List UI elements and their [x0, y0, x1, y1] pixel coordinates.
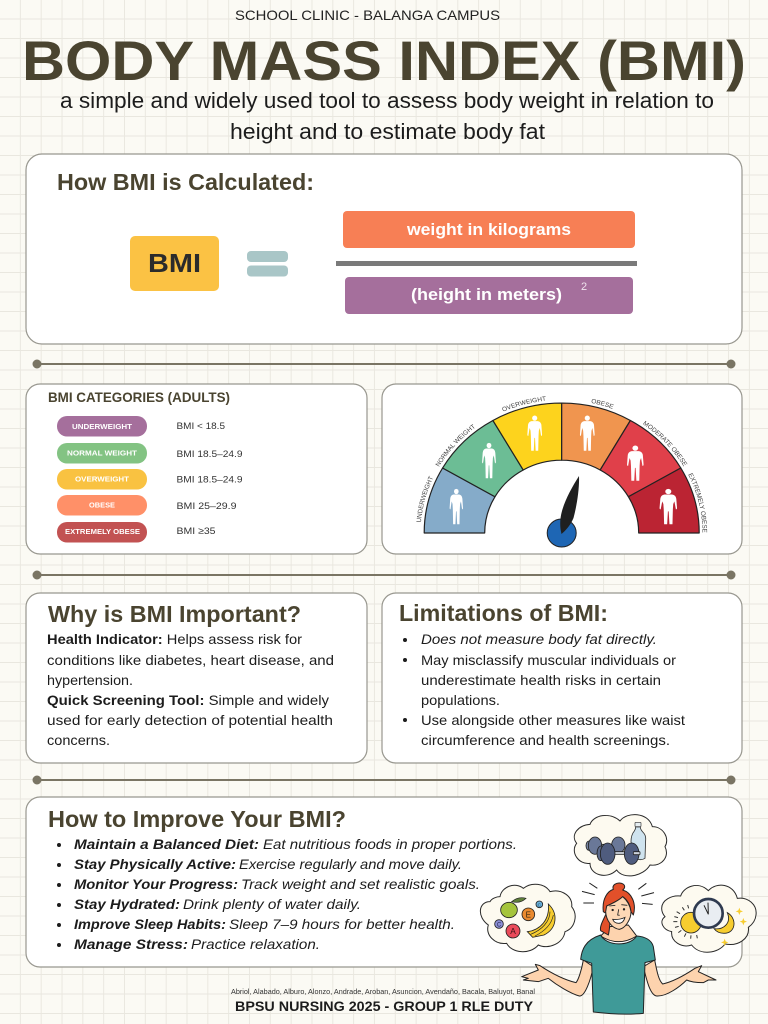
- subtitle: [60, 88, 714, 144]
- category: obese: BMI 25–29.9: [176, 501, 236, 512]
- text block: improvement tips: Drink plenty of water daily.: [183, 896, 361, 912]
- text block: limitations list: Does not measure body fat directly.: [421, 631, 657, 647]
- category: overweight: [57, 469, 242, 490]
- category: extremely obese: [57, 522, 216, 542]
- BMI box: BMI: [148, 248, 201, 278]
- text block: limitations list: Use alongside other measures like waist: [421, 712, 685, 728]
- text block: limitations list: May misclassify muscular individuals or: [421, 652, 676, 668]
- icon: cloud with clock, sun and moon: [662, 885, 756, 952]
- category: overweight: BMI 18.5–24.9: [176, 474, 242, 486]
- numerator: weight in kilograms: [343, 211, 635, 248]
- category: normal weight: BMI 18.5–24.9: [176, 449, 242, 460]
- icon: cloud with fruits and vitamins: C: [497, 922, 502, 928]
- gauge labels: [416, 396, 708, 532]
- illustration: woman with health thought clouds: [480, 815, 756, 1014]
- gauge labels: EXTREMELY OBESE: [688, 473, 708, 532]
- panel: limitations of BMI: [382, 593, 742, 763]
- gauge labels: MODERATE OBESE: [643, 420, 688, 466]
- header: school clinic: SCHOOL CLINIC - BALANGA CAMPUS: [235, 7, 500, 23]
- subtitle: height and to estimate body fat: [230, 119, 545, 144]
- equals sign: [247, 251, 288, 276]
- gauge labels: OBESE: [592, 399, 614, 409]
- icon: cloud with dumbbells and water bottle: [574, 815, 667, 876]
- text block: improvement tips: Improve Sleep Habits:: [74, 916, 226, 932]
- text block: why BMI is important: concerns.: [47, 732, 110, 748]
- gauge needle: [560, 476, 579, 534]
- footer: group members: Abriol, Alabado, Alburo, Alonzo, Andrade, Aroban, Asuncion, Avendaño, Bacala, Baluyot, Banal: [231, 989, 535, 996]
- icon: cloud with fruits and vitamins: A: [510, 926, 516, 936]
- denominator: height in meters squared: (height in meters): [411, 285, 562, 304]
- icon: cloud with fruits and vitamins: E: [526, 910, 531, 919]
- heading: how to improve your BMI: How to Improve Your BMI?: [48, 806, 346, 832]
- text block: limitations list: [403, 631, 685, 748]
- category: underweight: [57, 416, 225, 436]
- category: extremely obese: EXTREMELY OBESE: [65, 527, 140, 536]
- denominator: height in meters squared: [345, 277, 633, 314]
- text block: limitations list: underestimate health risks in certain: [421, 672, 661, 688]
- text block: improvement tips: Manage Stress:: [74, 936, 188, 952]
- text block: why BMI is important: used for early detection of potential health: [47, 712, 333, 728]
- category: obese: [57, 495, 236, 516]
- text block: improvement tips: Monitor Your Progress:: [74, 876, 238, 892]
- text block: limitations list: circumference and health screenings.: [421, 732, 670, 748]
- text block: limitations list: populations.: [421, 692, 500, 708]
- text block: why BMI is important: Health Indicator: Helps assess risk for: [47, 631, 302, 647]
- text block: improvement tips: Stay Hydrated:: [74, 896, 180, 912]
- text block: why BMI is important: Quick Screening Tool: Simple and widely: [47, 692, 329, 708]
- gauge hub: [547, 519, 576, 547]
- fraction bar: [336, 261, 637, 266]
- BMI box: [130, 236, 219, 291]
- heading: how BMI is calculated: How BMI is Calculated:: [57, 169, 314, 195]
- category: obese: OBESE: [89, 500, 115, 510]
- text block: improvement tips: Sleep 7–9 hours for better health.: [229, 916, 455, 932]
- gauge labels: NORMAL WEIGHT: [435, 424, 474, 466]
- text block: improvement tips: [57, 836, 517, 952]
- subtitle: a simple and widely used tool to assess body weight in relation to: [60, 88, 714, 113]
- icon: woman arms and torso: [522, 925, 716, 1014]
- gauge labels: OVERWEIGHT: [502, 396, 546, 412]
- panel: BMI categories: [26, 384, 367, 554]
- numerator: weight in kilograms: weight in kilograms: [406, 220, 571, 239]
- heading: why BMI is important: Why is BMI Important?: [48, 601, 301, 627]
- gauge figures: [450, 415, 677, 524]
- icon: cloud with fruits and vitamins: [480, 884, 575, 952]
- text block: improvement tips: Eat nutritious foods in proper portions.: [263, 836, 517, 852]
- gauge labels: UNDERWEIGHT: [416, 476, 433, 522]
- text block: improvement tips: Track weight and set realistic goals.: [241, 876, 480, 892]
- gauge segments: [424, 403, 699, 533]
- icon: woman head: [600, 883, 634, 935]
- denominator: height in meters squared: 2: [581, 281, 587, 293]
- text block: why BMI is important: hypertension.: [47, 672, 133, 688]
- heading: BMI categories: BMI CATEGORIES (ADULTS): [48, 389, 230, 405]
- panel: BMI gauge: [381, 383, 743, 555]
- category: normal weight: [57, 443, 242, 464]
- panel: how BMI is calculated: [26, 154, 742, 344]
- category: underweight: UNDERWEIGHT: [72, 422, 132, 431]
- title: BODY MASS INDEX (BMI): [22, 29, 746, 92]
- category: normal weight: NORMAL WEIGHT: [67, 448, 137, 458]
- text block: why BMI is important: [47, 631, 334, 748]
- text block: improvement tips: Maintain a Balanced Diet:: [74, 836, 259, 852]
- icon: emphasis lines around head: [582, 883, 654, 904]
- panel: how to improve your BMI: [26, 797, 742, 967]
- text block: improvement tips: Practice relaxation.: [191, 936, 320, 952]
- text block: improvement tips: Exercise regularly and move daily.: [239, 856, 462, 872]
- icon: cloud with fruits and vitamins: C: [538, 902, 542, 908]
- category: underweight: BMI < 18.5: [176, 421, 225, 432]
- panel: why BMI is important: [26, 593, 367, 763]
- text block: improvement tips: Stay Physically Active:: [74, 856, 236, 872]
- footer: group title: BPSU NURSING 2025 - GROUP 1 RLE DUTY: [235, 999, 533, 1014]
- heading: limitations of BMI: Limitations of BMI:: [399, 600, 608, 626]
- category: overweight: OVERWEIGHT: [75, 474, 129, 484]
- text block: why BMI is important: conditions like diabetes, heart disease, and: [47, 652, 334, 668]
- category: extremely obese: BMI ≥35: [176, 526, 216, 537]
